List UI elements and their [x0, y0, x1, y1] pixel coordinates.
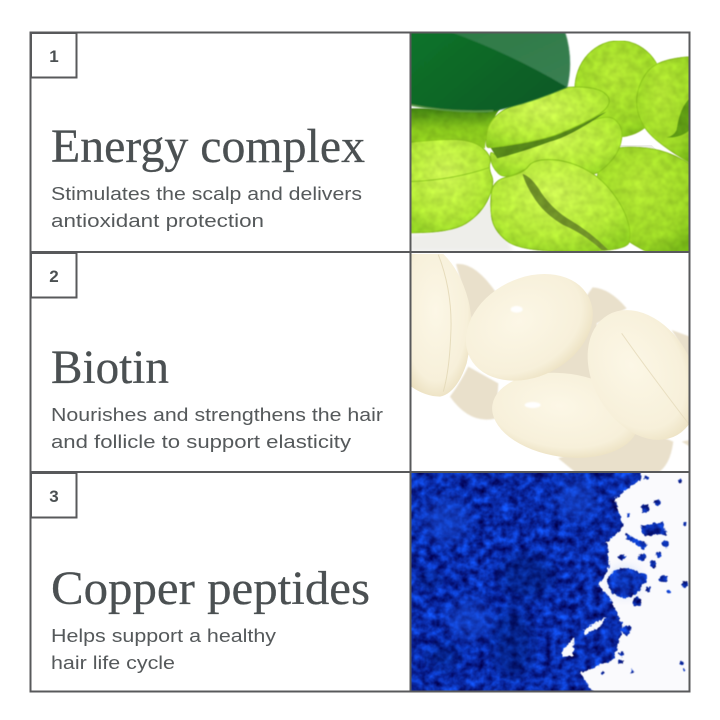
capsule shadows — [450, 264, 690, 473]
photo: green coffee beans and leaf — [407, 32, 693, 253]
centre bean upper lobe — [486, 87, 609, 148]
heading: biotin: Biotin — [51, 341, 169, 394]
number badge 2 — [31, 253, 76, 298]
highlights — [511, 306, 523, 313]
leaf — [407, 32, 570, 113]
text: energy complex description: antioxidant protection — [51, 210, 264, 231]
heading: energy complex: Energy complex — [51, 120, 365, 173]
photo: cream biotin capsules — [412, 254, 688, 471]
panel: energy complex — [31, 33, 365, 231]
heading: copper peptides: Copper peptides — [51, 562, 370, 615]
text: energy complex description: Stimulates the scalp and delivers — [51, 183, 362, 204]
lower capsule — [492, 372, 633, 457]
number badge 1 — [31, 33, 76, 78]
panel: copper peptides — [31, 473, 370, 673]
text: copper peptides description: Helps support a healthy — [51, 625, 277, 646]
number badge 1: 1 — [49, 47, 59, 66]
panel: biotin — [31, 253, 383, 452]
centre bean crease — [490, 112, 607, 158]
text: biotin description: and follicle to support elasticity — [51, 431, 352, 452]
text: biotin description: Nourishes and strengthens the hair — [51, 404, 383, 425]
left capsule — [407, 254, 471, 397]
number badge 3: 3 — [49, 487, 59, 506]
ground shadow — [410, 197, 513, 252]
photo: blue copper peptide powder — [412, 473, 688, 690]
lower right bean — [597, 147, 693, 253]
front bean — [491, 160, 630, 252]
powder shading — [418, 553, 553, 680]
centre capsule — [466, 274, 590, 381]
left bean — [407, 140, 493, 233]
bean behind left — [407, 108, 500, 148]
text: copper peptides description: hair life cycle — [51, 652, 175, 673]
top right bean — [575, 41, 663, 137]
right capsule — [588, 310, 688, 439]
powder mass and loose chunks — [412, 473, 688, 690]
far right bean — [637, 57, 693, 165]
number badge 2: 2 — [49, 267, 59, 286]
centre bean lower lobe — [490, 117, 622, 176]
number badge 3 — [31, 473, 76, 518]
